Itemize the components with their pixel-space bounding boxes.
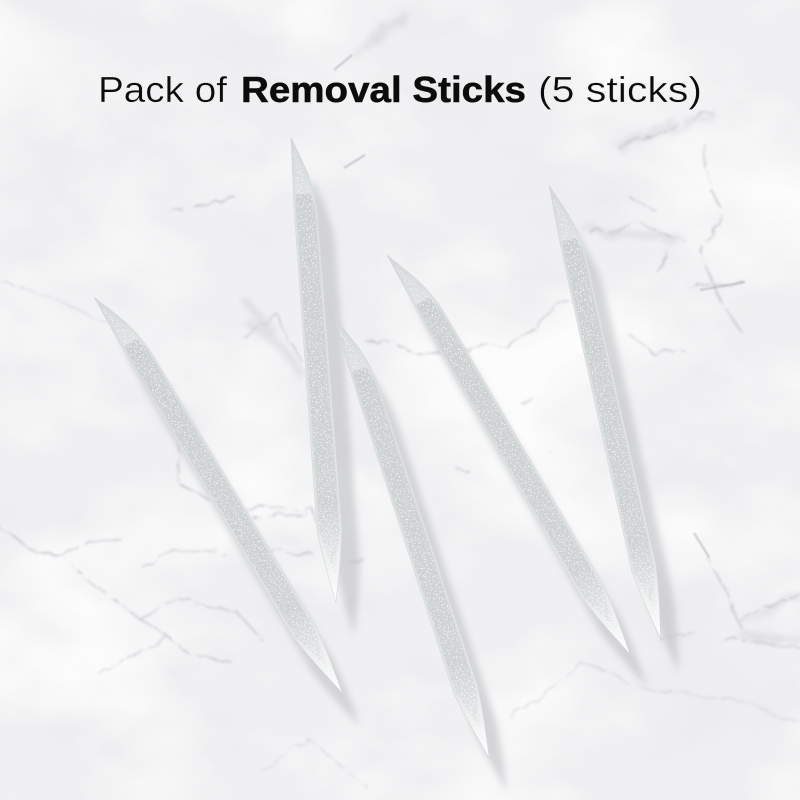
removal stick 2 bbox=[279, 135, 355, 604]
removal stick 5 bbox=[537, 180, 679, 642]
removal stick 4 bbox=[377, 245, 647, 661]
removal stick 3 bbox=[323, 311, 507, 762]
title: Pack of Removal Sticks (5 sticks): Pack of bbox=[98, 69, 228, 110]
removal stick 1 bbox=[84, 287, 359, 700]
cast shadows of sticks bbox=[107, 179, 697, 796]
title: Pack of Removal Sticks (5 sticks) bbox=[98, 69, 702, 110]
title: Pack of Removal Sticks (5 sticks): Removal Sticks bbox=[241, 69, 526, 110]
title: Pack of Removal Sticks (5 sticks): (5 sticks) bbox=[538, 69, 702, 110]
